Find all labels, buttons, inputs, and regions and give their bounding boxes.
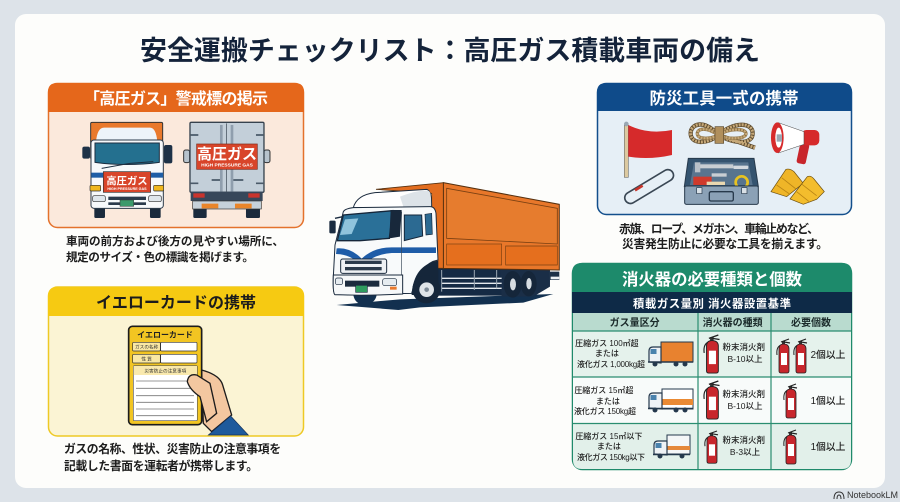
icon: large truck (648, 342, 693, 366)
row 2: 1個以上 (811, 394, 846, 407)
icon: hand holding card (129, 326, 248, 435)
row 2: B-10以上 (728, 401, 763, 411)
text: tools description: 赤旗、ロープ、メガホン、車輪止めなど、 (619, 222, 819, 236)
row 3 (575, 430, 846, 464)
icon: small truck (653, 435, 690, 458)
column headers: 消火器の種類 (703, 316, 763, 329)
icon: hand holding card: 性 質 (141, 355, 152, 362)
icon: hand holding card: 災害防止の注意事項 (144, 367, 187, 374)
icon: truck front (82, 122, 172, 218)
column headers: 必要個数 (791, 316, 831, 329)
row 1: 2個以上 (811, 348, 846, 361)
panel: yellow card (48, 287, 304, 436)
row 1: 圧縮ガス 100㎡超 (575, 338, 639, 348)
panel heading: イエローカードの携帯 (96, 293, 256, 312)
icon: extinguisher (784, 430, 797, 464)
icon: truck rear: 高圧ガス (197, 146, 257, 163)
panel heading: 「高圧ガス」警戒標の掲示 (84, 89, 268, 108)
panel header (572, 263, 852, 292)
table header row (573, 313, 851, 331)
icon: hand holding card: イエローカード (137, 330, 193, 339)
icon: extinguisher (784, 384, 797, 418)
row 2: 液化ガス 150kg超 (574, 406, 636, 416)
table title: 積載ガス量別 消火器設置基準 (633, 296, 791, 310)
panel: disaster tools (597, 83, 852, 214)
icons: tools (623, 122, 824, 206)
row 2: 粉末消火剤 (723, 389, 765, 399)
title: 安全運搬チェックリスト：高圧ガス積載車両の備え (140, 36, 760, 66)
row 3: または (597, 442, 621, 451)
icon: extinguisher (705, 431, 718, 463)
icon: red flag (624, 122, 672, 177)
icons: two extinguishers (777, 339, 807, 373)
watermark: NotebookLM: NotebookLM (847, 490, 898, 500)
icon: truck rear: HIGH PRESSURE GAS (201, 163, 254, 169)
column headers: ガス量区分 (610, 316, 660, 329)
icon: rope (691, 124, 755, 148)
text: warning sign description: 規定のサイズ・色の標識を掲げます。 (66, 250, 254, 264)
table title bar (572, 292, 852, 313)
text: tools description: 災害発生防止に必要な工具を揃えます。 (622, 237, 828, 251)
panel: fire extinguishers (572, 263, 852, 470)
row 3: 粉末消火剤 (723, 435, 765, 445)
row 3: B-3以上 (730, 447, 761, 457)
row 1 (575, 335, 846, 373)
icon: extinguisher (704, 335, 720, 373)
row 2: 圧縮ガス 15㎡超 (574, 385, 633, 395)
icon: medium truck (648, 389, 693, 412)
text: warning sign description: 車両の前方および後方の見やすい場所に、 (66, 234, 284, 248)
panel: warning sign (48, 83, 304, 228)
icon: toolbox (684, 158, 758, 204)
panel body (572, 264, 852, 470)
row 1: 粉末消火剤 (723, 342, 765, 352)
text: yellow card description: ガスの名称、性状、災害防止の注意事項を (64, 442, 281, 456)
icon: truck rear (184, 122, 270, 218)
row 3: 圧縮ガス 15㎡以下 (575, 431, 642, 441)
panel header (48, 287, 304, 316)
panel body (48, 287, 304, 436)
row 2 (574, 381, 846, 419)
icon: extinguisher (704, 381, 720, 419)
table (573, 313, 851, 469)
icon: truck front: 高圧ガス (106, 174, 148, 187)
panel body (598, 84, 852, 214)
row 2: または (596, 397, 620, 406)
row 1: 液化ガス 1,000kg超 (577, 359, 645, 369)
icon: wheel chocks (771, 169, 824, 204)
icon: sling (623, 168, 676, 206)
row 3: 液化ガス 150kg以下 (577, 452, 645, 462)
panel heading: 防災工具一式の携帯 (650, 89, 798, 108)
icon: truck front: HIGH PRESSURE GAS (107, 187, 147, 191)
panel header (597, 83, 852, 111)
text: yellow card description: 記載した書面を運転者が携帯します。 (64, 459, 258, 473)
icon: megaphone (771, 122, 819, 165)
illustration: central truck (329, 183, 559, 310)
panel body (48, 84, 304, 228)
panel header (48, 83, 304, 112)
panel heading: 消火器の必要種類と個数 (622, 271, 803, 289)
row 1: B-10以上 (728, 354, 763, 364)
row 3: 1個以上 (811, 440, 846, 453)
row 1: または (595, 349, 619, 358)
icon: hand holding card: ガスの名称 (135, 343, 159, 350)
